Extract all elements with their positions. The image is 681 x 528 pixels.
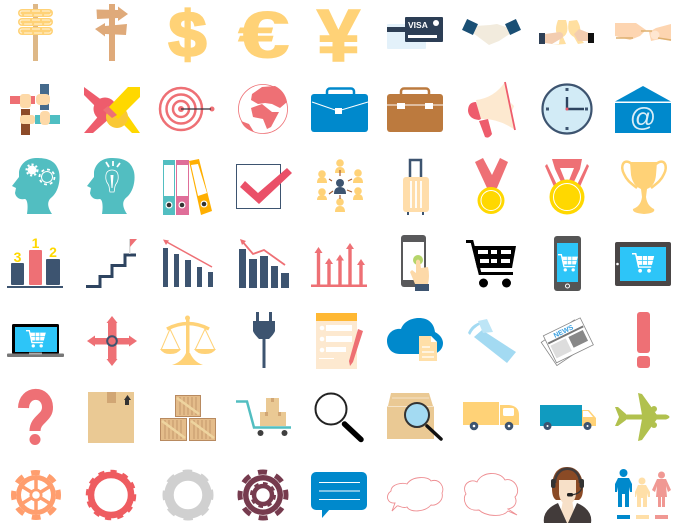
icon: clock — [542, 84, 592, 134]
icon: head with light bulb — [87, 158, 135, 214]
icon: email envelope — [615, 86, 671, 133]
icon: binders — [163, 159, 212, 215]
icon: brown briefcase — [387, 88, 443, 132]
icon: notepad and pencil — [316, 313, 363, 369]
icon: knot — [84, 87, 140, 133]
icon: globe — [238, 84, 288, 134]
icon: direction arrows signpost — [95, 4, 128, 61]
icon: euro: € — [238, 0, 290, 72]
icon: airplane — [615, 393, 670, 441]
icon: rolled paper — [468, 319, 516, 363]
icon: four way arrows — [87, 316, 137, 366]
icon: question mark — [24, 394, 48, 445]
icon: declining bar chart — [163, 240, 213, 287]
icon: large speech cloud outline — [464, 473, 518, 515]
icon: black shopping cart — [466, 242, 516, 288]
icon: medal — [475, 158, 508, 214]
icon: email envelope: @ — [630, 102, 656, 132]
icon: blue chat bubble — [311, 472, 367, 518]
icon: newspaper — [539, 317, 595, 367]
icon: speech cloud outline — [388, 478, 443, 511]
icon: family figures — [615, 469, 671, 519]
icon: exclamation mark — [637, 312, 650, 368]
icon: cloud with document — [387, 318, 443, 361]
icon: megaphone — [468, 82, 515, 138]
icon: box inspection — [387, 393, 441, 439]
icon: head with gears — [12, 158, 60, 214]
icon: customer service agent — [544, 467, 591, 523]
icon: tablet with cart — [615, 242, 671, 286]
icon: podium: 2 — [49, 244, 57, 260]
icon: grey gear — [165, 472, 211, 518]
icon: toasting glasses — [539, 20, 594, 45]
icon: hand cart with boxes — [236, 398, 291, 436]
icon: phone with cart — [554, 236, 581, 291]
icon: gold medal with ribbons — [545, 159, 589, 214]
icon: trophy — [622, 162, 666, 214]
icon: red gear — [88, 472, 134, 518]
icon: luggage — [403, 160, 429, 215]
icon: smartphone touch — [401, 235, 429, 291]
icon: wooden signpost — [18, 4, 53, 61]
icon: handshake — [462, 19, 521, 45]
icon: podium: 1 — [32, 235, 40, 251]
icon: blue briefcase — [311, 88, 368, 132]
icon: credit card — [387, 17, 443, 49]
icon: yellow truck — [463, 402, 519, 429]
icon: orange gear — [14, 472, 58, 518]
icon: people network — [317, 159, 363, 212]
icon: blue truck — [540, 405, 596, 428]
icon: rising arrows chart — [311, 243, 367, 287]
icon: electric plug — [253, 312, 275, 368]
icon: laptop with cart — [7, 324, 64, 357]
icon: check box — [236, 164, 292, 208]
icon: podium — [7, 235, 63, 288]
icon: fluctuating bar chart — [239, 239, 289, 288]
icon: credit card: VISA — [408, 20, 428, 30]
icon: stairs with flag — [86, 239, 137, 286]
icon: balance scale — [160, 316, 216, 365]
icon: cardboard box — [88, 392, 134, 443]
icon: wooden crates — [160, 396, 216, 440]
icon: dark gear — [240, 472, 286, 518]
icon: newspaper: NEWS — [553, 324, 575, 340]
icon: target — [160, 88, 214, 130]
icon: linked hands — [10, 84, 60, 135]
icon: hands with rope — [615, 23, 671, 41]
icon: podium: 3 — [14, 249, 22, 265]
icon: magnifying glass — [316, 394, 361, 440]
